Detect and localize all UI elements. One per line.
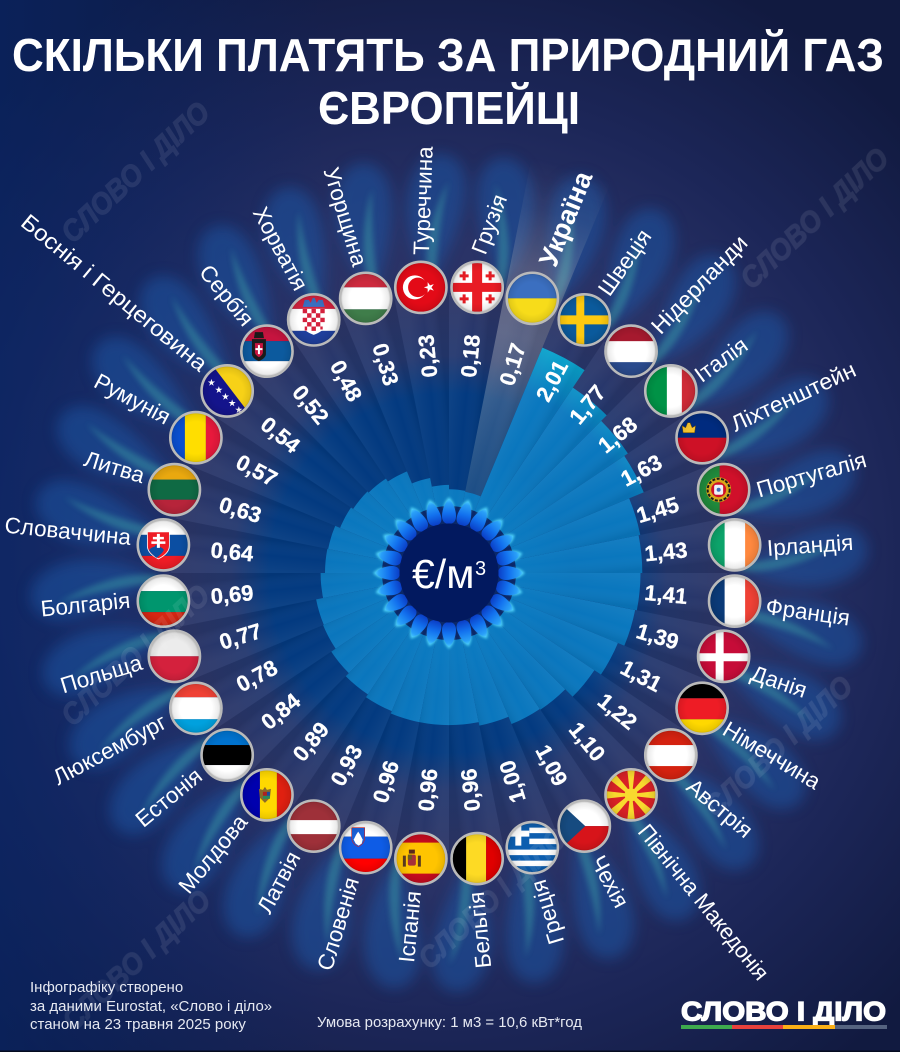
- value Боснія і Герцеговина: 0,54: [256, 412, 305, 459]
- label Австрія: Австрія: [682, 774, 758, 843]
- label Північна Македонія: Північна Македонія: [633, 819, 774, 985]
- label Бельгія: Бельгія: [464, 891, 496, 970]
- flag: Latvia: [288, 800, 340, 852]
- flag: Ukraine: [506, 272, 558, 324]
- value Туреччина: 0,23: [413, 333, 442, 379]
- central gas burner with €/m3: 3: [475, 558, 486, 580]
- values: [209, 333, 689, 813]
- value Австрія: 1,22: [593, 688, 642, 735]
- value Данія: 1,39: [633, 618, 682, 655]
- value Грузія: 0,18: [456, 334, 485, 379]
- label Боснія і Герцеговина: Боснія і Герцеговина: [16, 209, 213, 377]
- label Латвія: Латвія: [252, 847, 306, 918]
- central gas burner with €/m3: [373, 497, 525, 649]
- value Греція: 1,00: [494, 757, 531, 806]
- value Словенія: 0,96: [368, 758, 404, 806]
- flag: Lithuania: [148, 464, 200, 516]
- value Румунія: 0,57: [232, 449, 281, 492]
- flag: Romania: [170, 412, 222, 464]
- label Польща: Польща: [57, 650, 146, 698]
- label Румунія: Румунія: [90, 369, 175, 430]
- value Португалія: 1,45: [634, 492, 682, 528]
- bars: [316, 348, 644, 726]
- value Франція: 1,41: [643, 580, 688, 609]
- value Сербія: 0,52: [287, 380, 334, 429]
- value Болгарія: 0,69: [210, 580, 255, 609]
- value Ірландія: 1,43: [643, 537, 689, 566]
- label Ліхтенштейн: Ліхтенштейн: [727, 357, 860, 437]
- source note: станом на 23 травня 2025 року: [30, 1016, 246, 1033]
- label Грузія: Грузія: [467, 191, 512, 258]
- watermarks: СЛОВО І ДІЛО: [56, 884, 217, 1038]
- label Нідерланди: Нідерланди: [646, 230, 752, 339]
- watermarks: СЛОВО І ДІЛО: [698, 670, 859, 824]
- value Польща: 0,77: [216, 618, 265, 655]
- watermarks: СЛОВО І ДІЛО: [412, 822, 573, 976]
- calculation note: Умова розрахунку: 1 м3 = 10,6 кВт*год: [317, 1014, 582, 1031]
- label Хорватія: Хорватія: [248, 203, 313, 295]
- flag: Liechtenstein: [676, 412, 728, 464]
- label Португалія: Португалія: [754, 447, 869, 502]
- flag: Austria: [645, 729, 697, 781]
- radial bar chart: gas price per m3: [168, 191, 727, 851]
- label Україна: Україна: [533, 166, 599, 271]
- country labels: [4, 145, 869, 985]
- flag: Moldova: [241, 769, 293, 821]
- label Молдова: Молдова: [174, 809, 253, 898]
- label Швеція: Швеція: [593, 225, 657, 300]
- label Угорщина: Угорщина: [318, 164, 372, 270]
- value Україна: 0,17: [494, 340, 531, 389]
- label Болгарія: Болгарія: [40, 588, 131, 622]
- value Іспанія: 0,96: [413, 767, 442, 813]
- value Латвія: 0,93: [325, 741, 368, 790]
- label Сербія: Сербія: [194, 260, 259, 331]
- flag: Italy: [645, 365, 697, 417]
- central gas burner with €/m3: €/м: [412, 551, 474, 597]
- source note: Інфографіку створено: [30, 979, 183, 996]
- value Литва: 0,63: [216, 492, 264, 528]
- flag: Bosnia and Herzegovina: [201, 365, 254, 420]
- title: ЄВРОПЕЙЦІ: [318, 82, 580, 134]
- label Чехія: Чехія: [586, 851, 634, 912]
- label Італія: Італія: [690, 332, 752, 387]
- value Бельгія: 0,96: [456, 767, 485, 812]
- value Молдова: 0,89: [288, 717, 334, 766]
- label Туреччина: Туреччина: [409, 145, 438, 255]
- label Німеччина: Німеччина: [718, 717, 825, 795]
- label Ірландія: Ірландія: [766, 530, 854, 561]
- flag: Poland: [148, 630, 200, 682]
- flag: Ireland: [709, 519, 761, 571]
- label Греція: Греція: [526, 877, 569, 947]
- flag: Bulgaria: [137, 575, 189, 627]
- watermarks: СЛОВО І ДІЛО: [55, 579, 216, 733]
- flag: Croatia: [288, 294, 340, 346]
- flag: Denmark: [698, 630, 750, 682]
- value Словаччина: 0,64: [209, 537, 255, 566]
- flag: Germany: [676, 682, 728, 734]
- flag: Sweden: [558, 294, 610, 346]
- value Люксембург: 0,78: [232, 655, 282, 697]
- flag: Georgia: [451, 261, 503, 313]
- source note: за даними Eurostat, «Слово і діло»: [30, 998, 272, 1015]
- value Чехія: 1,09: [530, 741, 573, 790]
- value Північна Македонія: 1,10: [564, 717, 610, 766]
- value Естонія: 0,84: [256, 688, 306, 735]
- title: [12, 29, 884, 134]
- flag: Greece: [506, 822, 558, 874]
- value Угорщина: 0,33: [367, 340, 404, 389]
- flags ring: [137, 261, 761, 885]
- label Данія: Данія: [748, 661, 810, 703]
- flag: Netherlands: [605, 325, 657, 377]
- value Німеччина: 1,31: [616, 655, 666, 697]
- label Литва: Литва: [81, 446, 148, 488]
- value Ліхтенштейн: 1,63: [617, 449, 666, 492]
- flag: Turkey: [395, 261, 447, 313]
- value Італія: 1,68: [593, 412, 642, 458]
- watermarks: СЛОВО І ДІЛО: [55, 96, 216, 250]
- flag: Slovenia: [340, 822, 392, 874]
- flag: Portugal: [698, 464, 750, 516]
- flag: Belgium: [451, 833, 503, 885]
- flag: France: [709, 575, 761, 627]
- label Словенія: Словенія: [312, 874, 364, 973]
- label Естонія: Естонія: [131, 763, 207, 832]
- background flames: [29, 153, 869, 993]
- label Франція: Франція: [764, 594, 852, 631]
- source note: [30, 979, 272, 1033]
- flag: Serbia: [241, 325, 293, 377]
- flag: Czechia: [558, 800, 610, 852]
- flag: Estonia: [201, 729, 253, 781]
- flag: Spain: [395, 833, 447, 885]
- value Хорватія: 0,48: [325, 356, 367, 406]
- value Нідерланди: 1,77: [564, 380, 611, 429]
- label Люксембург: Люксембург: [49, 709, 171, 790]
- flag: Slovakia: [137, 519, 189, 571]
- value Швеція: 2,01: [531, 356, 573, 406]
- flag: Hungary: [340, 272, 392, 324]
- logo: СЛОВО І ДІЛО: [681, 996, 886, 1026]
- highlight sector: Ukraine: [465, 191, 598, 496]
- title: СКІЛЬКИ ПЛАТЯТЬ ЗА ПРИРОДНИЙ ГАЗ: [12, 29, 884, 81]
- label Словаччина: Словаччина: [4, 513, 133, 550]
- label Іспанія: Іспанія: [394, 890, 426, 964]
- flag: North Macedonia: [604, 768, 658, 822]
- flag: Luxembourg: [170, 682, 222, 734]
